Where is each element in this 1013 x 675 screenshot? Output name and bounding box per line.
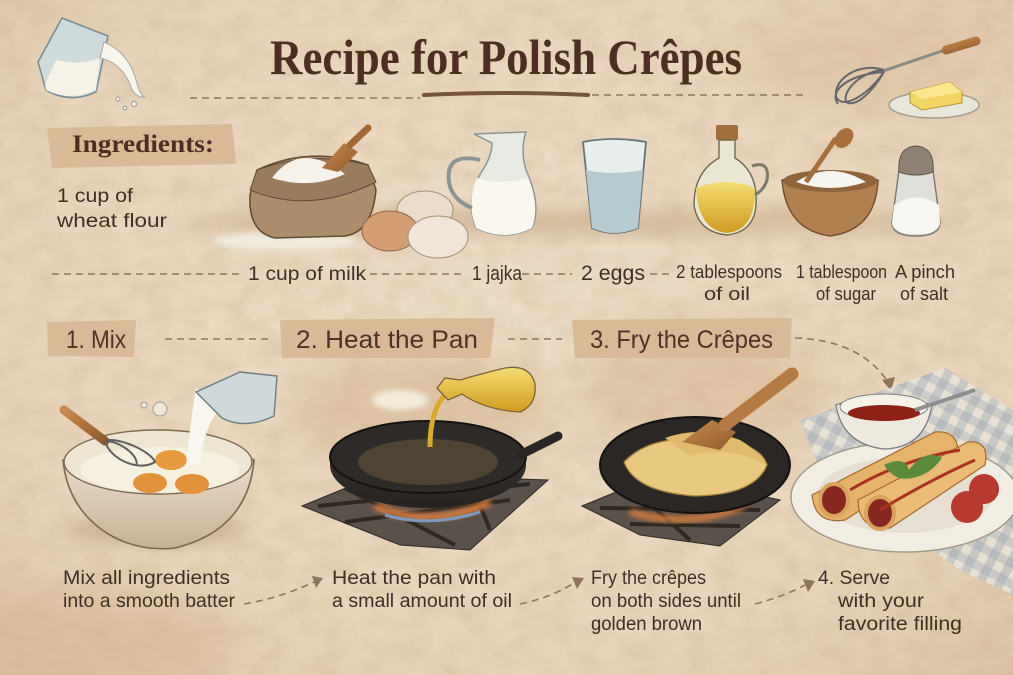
step description: serve: 4. Serve (818, 568, 890, 589)
icon: sugar bowl (782, 124, 878, 236)
heading: Ingredients (47, 124, 236, 168)
step heading 3 (572, 318, 792, 358)
step description: mix: into a smooth batter (63, 591, 236, 612)
illustration: mixing bowl (63, 372, 277, 549)
icon: flour sack (215, 128, 376, 250)
ingredient labels row: 1 tablespoon (796, 262, 887, 282)
icon: oil bottle (694, 125, 767, 235)
step description: mix (63, 568, 236, 612)
ingredient labels row: 1 cup of milk (248, 264, 367, 285)
step heading 3: 3. Fry the Crêpes (590, 326, 773, 354)
icon: milk jug (449, 132, 536, 235)
ingredient labels row: of salt (900, 284, 948, 304)
arrow 3 (755, 579, 815, 604)
ingredient labels row: A pinch (895, 262, 955, 282)
step description: serve (818, 568, 962, 635)
illustration: served crepes (791, 368, 1013, 595)
text: 1 cup of wheat flour: 1 cup of (57, 186, 134, 207)
icon: salt shaker (892, 146, 940, 236)
step description: serve: with your (837, 591, 925, 612)
icon: eggs (362, 191, 468, 258)
step description: fry (591, 568, 741, 635)
ingredient labels row: 2 eggs (581, 262, 645, 285)
step description: heat: a small amount of oil (332, 591, 512, 612)
arrow 1 (244, 576, 323, 604)
step description: fry: golden brown (591, 614, 702, 635)
step heading 1 (47, 320, 136, 357)
icon: measuring cup pouring milk (38, 18, 145, 110)
step description: serve: favorite filling (838, 614, 962, 635)
title: Recipe for Polish Crêpes (270, 29, 742, 85)
icon: water glass (583, 139, 646, 233)
step description: fry: Fry the crêpes (591, 568, 706, 589)
ingredient labels row: of oil (704, 284, 750, 304)
illustration: crepe in pan with spatula (582, 374, 792, 546)
step description: heat (332, 568, 512, 612)
step description: heat: Heat the pan with (332, 568, 496, 589)
step heading 2: 2. Heat the Pan (296, 326, 478, 354)
title underline (190, 93, 805, 98)
text: 1 cup of wheat flour: wheat flour (56, 211, 168, 232)
step heading 1: 1. Mix (66, 326, 126, 354)
step description: fry: on both sides until (591, 591, 741, 612)
heading: Ingredients: Ingredients: (72, 131, 214, 158)
icon: whisk and butter (836, 41, 979, 118)
illustration: pan on burner with oil (302, 367, 558, 550)
ingredient labels row (52, 262, 955, 304)
connector dashes (165, 338, 895, 391)
ingredient labels row: of sugar (816, 284, 876, 304)
step heading 2 (280, 318, 495, 358)
ingredient labels row: 1 jajka (472, 263, 523, 285)
arrow 2 (520, 577, 584, 604)
ingredient labels row: 2 tablespoons (676, 262, 782, 282)
step description: mix: Mix all ingredients (63, 568, 230, 589)
